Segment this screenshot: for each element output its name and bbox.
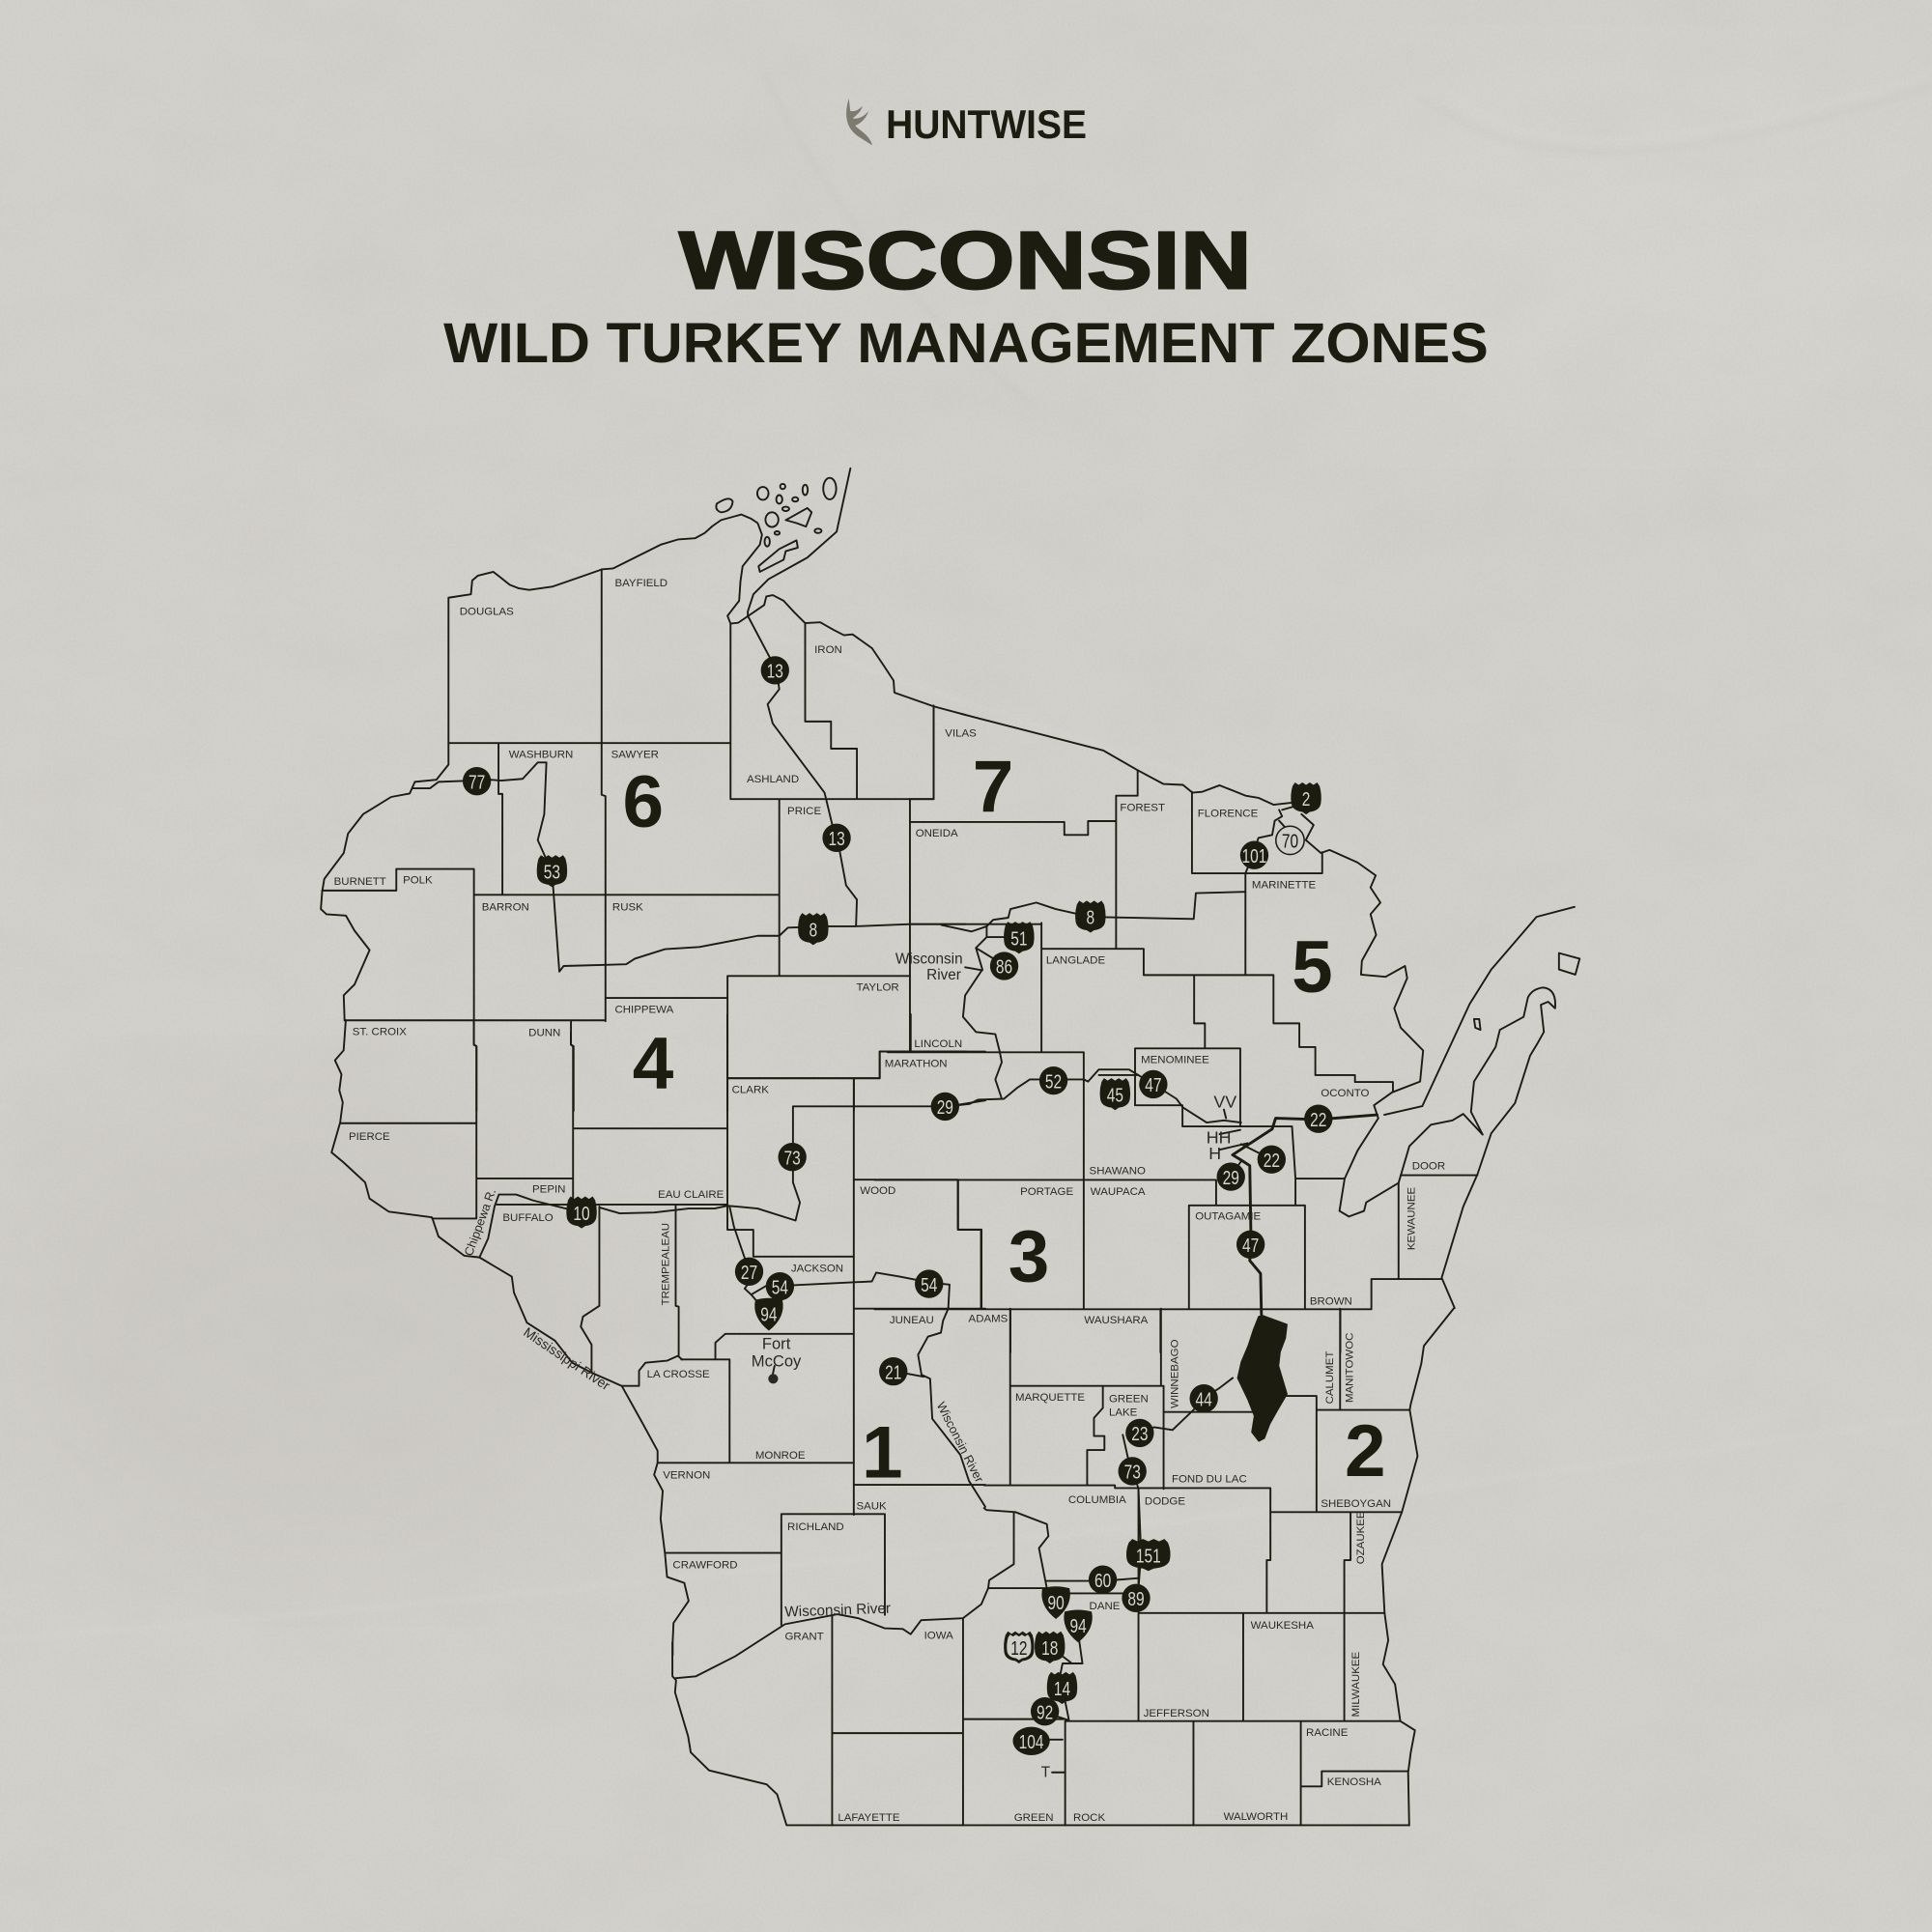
county labels: MANITOWOC	[1345, 1333, 1356, 1403]
county labels: CLARK	[732, 1084, 769, 1095]
subtitle: WILD TURKEY MANAGEMENT ZONES	[443, 312, 1489, 375]
county labels: COLUMBIA	[1068, 1494, 1126, 1506]
water and place labels: VV	[1213, 1093, 1236, 1112]
state highway markers: 13	[767, 661, 783, 682]
county labels: MONROE	[755, 1450, 806, 1462]
water and place labels: HH	[1207, 1128, 1232, 1148]
state highway markers: 77	[469, 771, 485, 793]
county labels: FOREST	[1120, 802, 1165, 813]
state highway markers: 73	[1124, 1462, 1141, 1483]
zone numbers: 7	[973, 747, 1013, 829]
water and place labels: Fort	[762, 1335, 791, 1353]
county labels: POLK	[403, 875, 433, 887]
water and place labels: Wisconsin River	[934, 1400, 987, 1486]
county labels	[334, 578, 1445, 1824]
US and interstate highway shields: 2	[1302, 788, 1310, 810]
state highway markers: 21	[885, 1361, 901, 1383]
zone numbers: 4	[633, 1022, 674, 1104]
county labels: LINCOLN	[914, 1038, 962, 1050]
county labels: EAU CLAIRE	[658, 1189, 724, 1201]
county labels: MENOMINEE	[1141, 1055, 1209, 1066]
state highway markers: 104	[1019, 1731, 1044, 1752]
county labels: WAUPACA	[1091, 1186, 1146, 1198]
US and interstate highway shields: 94	[760, 1303, 778, 1325]
Fort McCoy location dot	[768, 1374, 778, 1383]
US and interstate highway shields: 14	[1054, 1678, 1070, 1700]
water and place labels: Chippewa R.	[461, 1186, 498, 1258]
county labels: CALUMET	[1324, 1351, 1336, 1404]
county labels: WALWORTH	[1224, 1811, 1288, 1823]
state highway markers: 29	[937, 1096, 953, 1119]
state highway markers: 27	[741, 1262, 757, 1283]
county labels: SHAWANO	[1090, 1166, 1146, 1178]
county labels: WOOD	[860, 1185, 895, 1197]
county labels: BURNETT	[334, 876, 386, 888]
county labels: MARATHON	[885, 1059, 948, 1070]
county labels: DODGE	[1145, 1495, 1185, 1507]
county labels: KENOSHA	[1327, 1776, 1381, 1788]
zone numbers: 5	[1292, 926, 1333, 1009]
county labels: BAYFIELD	[614, 578, 668, 589]
zone numbers: 1	[862, 1411, 903, 1493]
county labels: VERNON	[663, 1470, 710, 1482]
county labels: ROCK	[1073, 1812, 1105, 1824]
US and interstate highway shields: 53	[544, 861, 560, 883]
state highway markers: 92	[1037, 1701, 1053, 1723]
state highway markers: 47	[1145, 1074, 1162, 1096]
state highway markers: 70	[1282, 831, 1298, 852]
county labels: ST. CROIX	[353, 1026, 407, 1037]
county labels: PRICE	[787, 806, 821, 817]
county labels: ADAMS	[969, 1314, 1009, 1325]
county labels: CRAWFORD	[672, 1560, 738, 1572]
icon: antler	[846, 99, 872, 146]
US and interstate highway shields: 8	[810, 919, 817, 941]
county labels: PEPIN	[532, 1184, 565, 1196]
US and interstate highway shields: 151	[1136, 1545, 1161, 1567]
state highway markers: 22	[1264, 1150, 1280, 1171]
county labels: CHIPPEWA	[614, 1004, 674, 1015]
county labels: IOWA	[924, 1630, 953, 1641]
county labels: BROWN	[1310, 1296, 1352, 1308]
state highway markers: 54	[921, 1274, 937, 1295]
county labels: DANE	[1090, 1601, 1121, 1612]
US and interstate highway shields: 51	[1010, 927, 1027, 950]
water and place labels: H	[1208, 1144, 1221, 1163]
county labels: WAUSHARA	[1084, 1315, 1149, 1326]
county labels: DOUGLAS	[460, 606, 514, 617]
state highway markers: 73	[784, 1147, 801, 1169]
title: WISCONSIN	[679, 214, 1252, 305]
water and place labels: Wisconsin River	[784, 1601, 891, 1620]
county labels: LANGLADE	[1046, 954, 1105, 966]
logo	[846, 99, 1087, 147]
county labels: WINNEBAGO	[1169, 1339, 1180, 1408]
state highway markers	[463, 656, 1332, 1755]
US and interstate highway shields: 90	[1047, 1592, 1065, 1613]
county labels: BUFFALO	[502, 1212, 554, 1224]
county labels: JUNEAU	[890, 1315, 934, 1326]
county labels: FLORENCE	[1198, 809, 1259, 820]
US and interstate highway shields: 18	[1041, 1637, 1058, 1660]
water and place labels: McCoy	[752, 1352, 802, 1371]
US and interstate highway shields: 12	[1010, 1637, 1027, 1660]
US and interstate highway shields: 45	[1107, 1084, 1123, 1106]
zone numbers: 6	[623, 761, 664, 843]
county labels: DOOR	[1412, 1160, 1445, 1172]
map of Wisconsin	[321, 469, 1579, 1825]
county labels: ONEIDA	[916, 828, 958, 839]
state highway markers: 47	[1242, 1235, 1259, 1256]
state highway markers: 86	[996, 956, 1012, 978]
county labels: FOND DU LAC	[1172, 1473, 1247, 1485]
county labels: OUTAGAMIE	[1195, 1211, 1262, 1223]
county labels: IRON	[814, 644, 842, 656]
county labels: RACINE	[1306, 1727, 1349, 1739]
state highway markers: 101	[1242, 845, 1266, 867]
southern county lines and coast	[672, 1308, 1454, 1825]
county labels: MARINETTE	[1252, 880, 1317, 892]
southern roads	[773, 1366, 1233, 1773]
Lake Winnebago	[1238, 1316, 1287, 1441]
state highway markers: 22	[1310, 1109, 1326, 1130]
county labels: PIERCE	[349, 1131, 390, 1143]
water and place labels: Mississippi River	[521, 1324, 613, 1393]
water and place labels: Wisconsin	[895, 951, 963, 967]
county labels: DUNN	[528, 1028, 560, 1039]
wordmark: HUNTWISE	[886, 101, 1087, 147]
county labels: MARQUETTE	[1015, 1392, 1085, 1404]
state highway markers: 29	[1223, 1167, 1239, 1188]
county labels: LAKE	[1109, 1407, 1138, 1419]
county labels: GREEN	[1109, 1394, 1149, 1406]
zone numbers	[623, 747, 1386, 1493]
county labels: KEWAUNEE	[1406, 1187, 1417, 1250]
state highway markers: 13	[828, 828, 845, 850]
county labels: PORTAGE	[1020, 1186, 1073, 1198]
county labels: LAFAYETTE	[838, 1812, 900, 1824]
county labels: OCONTO	[1321, 1088, 1370, 1099]
county labels: GRANT	[784, 1632, 824, 1643]
county labels: RUSK	[612, 902, 643, 914]
county labels: JACKSON	[791, 1263, 843, 1274]
state highway markers: 52	[1045, 1070, 1062, 1093]
southwest county lines and coast	[331, 1014, 985, 1655]
county labels: BARRON	[482, 902, 529, 914]
county labels: WAUKESHA	[1251, 1620, 1314, 1632]
county labels: VILAS	[945, 728, 977, 740]
county labels: TREMPEALEAU	[661, 1223, 672, 1305]
state highway markers: 44	[1196, 1388, 1212, 1410]
zone numbers: 3	[1009, 1216, 1049, 1298]
zone numbers: 2	[1345, 1410, 1386, 1492]
county labels: GREEN	[1014, 1812, 1054, 1824]
county labels: LA CROSSE	[647, 1369, 710, 1380]
county labels: WASHBURN	[509, 749, 573, 760]
state highway markers: 23	[1131, 1423, 1148, 1445]
county labels: RICHLAND	[787, 1521, 844, 1533]
US and interstate highway shields: 10	[573, 1203, 590, 1224]
county labels: OZAUKEE	[1355, 1511, 1367, 1564]
county labels: MILWAUKEE	[1350, 1651, 1362, 1717]
US and interstate highway shields: 94	[1069, 1615, 1087, 1637]
county labels: SAWYER	[611, 749, 659, 760]
county labels: JEFFERSON	[1144, 1708, 1209, 1719]
US and interstate highway shields: 8	[1087, 907, 1094, 928]
US and interstate highway shields	[537, 782, 1321, 1704]
county labels: SHEBOYGAN	[1321, 1498, 1391, 1510]
state highway markers: 89	[1127, 1588, 1145, 1609]
state highway markers: 60	[1094, 1570, 1111, 1591]
water and place labels: River	[926, 967, 961, 983]
northeast county lines and coast	[874, 705, 1579, 1352]
state highway markers: 54	[772, 1276, 788, 1298]
county labels: TAYLOR	[856, 982, 899, 994]
county labels: ASHLAND	[747, 774, 799, 785]
county labels: SAUK	[856, 1500, 887, 1512]
water and place labels: T	[1041, 1764, 1050, 1780]
water and place labels	[461, 951, 1236, 1780]
northwest county lines and coast	[321, 469, 966, 1111]
